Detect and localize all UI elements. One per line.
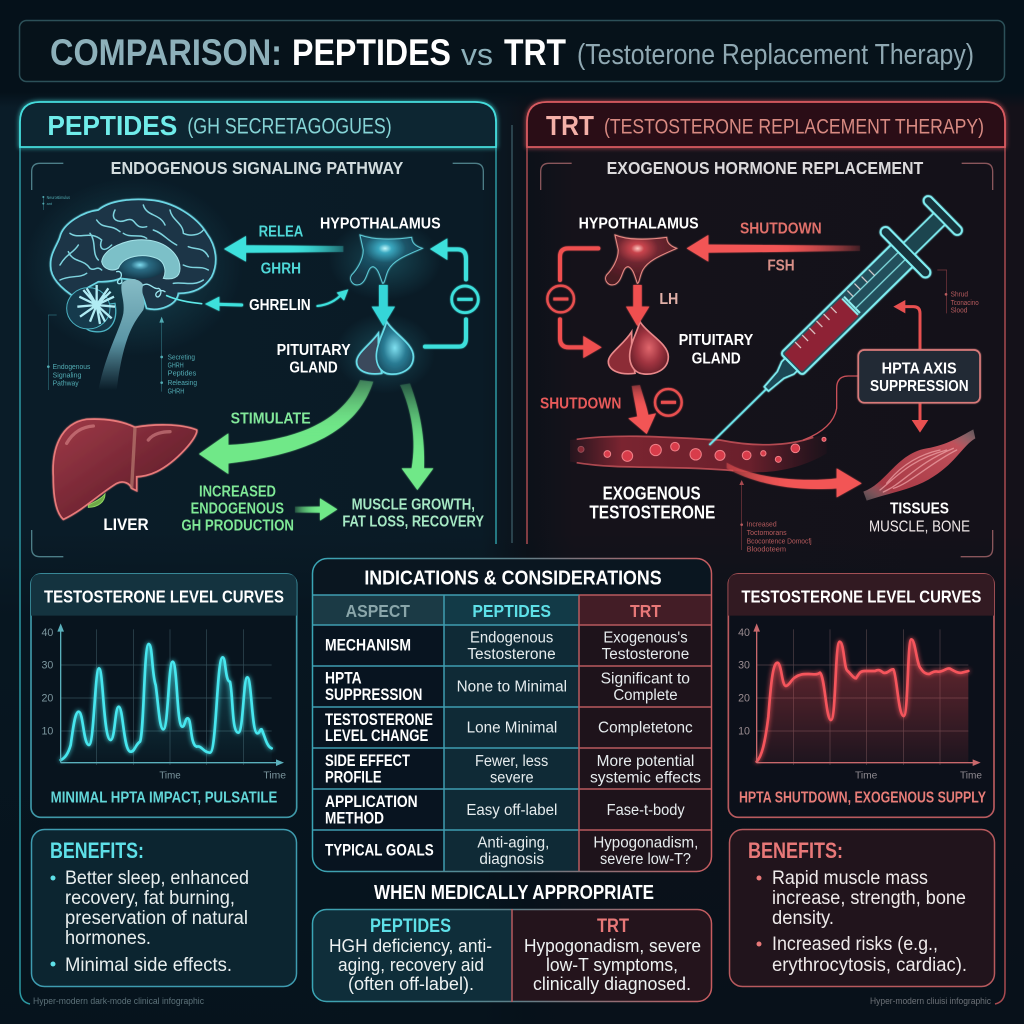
title bar: PEPTIDES <box>292 32 451 73</box>
panel: when medically appropriate: (often off-label). <box>348 974 474 994</box>
flow labels <box>540 215 970 536</box>
arrow: negative feedback <box>560 248 602 358</box>
panel: trt benefits: erythrocytosis, cardiac). <box>772 955 967 976</box>
flow labels: FSH <box>767 258 795 275</box>
pathway heading <box>32 158 483 557</box>
title bar <box>20 20 1004 82</box>
arrow: ghrelin <box>205 289 348 311</box>
table: indications and considerations: Completetonc <box>598 720 693 737</box>
panel: trt benefits <box>730 830 994 986</box>
panel: peptides benefits <box>32 830 296 986</box>
chart: trt testosterone curves: 40 <box>738 627 750 639</box>
icon: brain <box>23 177 243 390</box>
chart: trt testosterone curves: Time <box>960 770 982 781</box>
flow labels: LH <box>659 291 678 308</box>
table: indications and considerations: Testosterone <box>467 646 556 663</box>
panel: when medically appropriate: Hypogonadism, severe <box>524 936 701 956</box>
icon: minus <box>655 389 682 416</box>
annotation: brain labels: GHRH <box>168 360 184 369</box>
panel: trt benefits: density. <box>772 908 834 929</box>
annotation: brain labels <box>42 195 197 395</box>
table: indications and considerations: Significant to <box>601 670 690 687</box>
callout: HPTA axis suppression: HPTA AXIS <box>882 360 957 377</box>
table: indications and considerations: TESTOSTERONE <box>325 710 433 729</box>
annotation: brain labels: Releasing <box>168 378 197 387</box>
table: indications and considerations: TRT <box>630 601 661 621</box>
table: indications and considerations: Exogenous's <box>603 630 688 647</box>
panel: when medically appropriate: aging, recovery aid <box>338 955 484 975</box>
table: indications and considerations: Complete <box>613 687 678 704</box>
icon: hypothalamus <box>328 220 442 300</box>
table: indications and considerations: INDICATIONS & CONSIDERATIONS <box>364 567 662 589</box>
flow labels: GHRH <box>261 260 301 277</box>
table: indications and considerations: Easy off-label <box>466 802 557 819</box>
annotation: small notes <box>739 270 979 553</box>
table: indications and considerations: LEVEL CHANGE <box>325 726 428 745</box>
peptides heading: PEPTIDES <box>47 110 177 141</box>
annotation: small notes: Slood <box>951 306 967 315</box>
panel: when medically appropriate: PEPTIDES <box>370 916 451 937</box>
flow labels: EXOGENOUS <box>603 482 701 503</box>
flow labels: MUSCLE GROWTH, <box>352 496 475 513</box>
flow labels: STIMULATE <box>231 410 311 427</box>
icon: muscle <box>863 429 975 501</box>
panel: peptides benefits: BENEFITS: <box>50 838 144 863</box>
peptides heading: (GH SECRETAGOGUES) <box>187 113 392 138</box>
table: indications and considerations: Fase-t-body <box>607 802 685 819</box>
flow labels: TESTOSTERONE <box>589 502 715 523</box>
table: indications and considerations: Hypogonadism, <box>593 835 698 852</box>
annotation: small notes: Increased <box>747 520 777 529</box>
arrow: stimulate liver <box>199 380 373 474</box>
annotation: brain labels: GHRH <box>168 386 184 395</box>
footer note right: Hyper-modern cliuisi infographic <box>870 996 991 1006</box>
annotation: brain labels: Signaling <box>53 370 81 379</box>
icon: pituitary gland <box>335 313 435 393</box>
flow labels: INCREASED <box>199 484 276 501</box>
panel: when medically appropriate: TRT <box>597 916 629 937</box>
flow labels: GH PRODUCTION <box>181 518 294 535</box>
table: indications and considerations: PROFILE <box>325 767 382 786</box>
icon: liver <box>53 419 197 519</box>
table: indications and considerations: Anti-aging, <box>477 835 549 852</box>
flow labels: TISSUES <box>890 500 949 517</box>
pathway heading: ENDOGENOUS SIGNALING PATHWAY <box>111 158 403 178</box>
flow labels: MUSCLE, BONE <box>869 519 970 536</box>
trt diagram <box>540 110 993 557</box>
peptides heading <box>47 110 392 141</box>
panel: when medically appropriate <box>312 909 712 1002</box>
callout: HPTA axis suppression: SUPPRESSION <box>870 378 969 395</box>
chart: trt testosterone curves <box>728 574 994 817</box>
arrow: hypothalamus to pituitary <box>372 285 395 326</box>
table: indications and considerations: HPTA <box>325 669 362 688</box>
table: indications and considerations: MECHANISM <box>325 636 411 655</box>
arrow: feedback loop <box>425 238 466 347</box>
chart: peptides testosterone curves: TESTOSTERONE LEVEL CURVES <box>44 586 284 606</box>
icon: minus <box>452 286 478 313</box>
arrow: to muscle growth <box>400 383 433 490</box>
chart: peptides testosterone curves: Time <box>263 770 286 781</box>
flow labels: FAT LOSS, RECOVERY <box>342 514 484 531</box>
annotation: small notes: Toctomorans <box>747 528 787 537</box>
arrow: blood to tissues <box>727 463 862 497</box>
icon: syringe <box>686 189 969 469</box>
panel: when medically appropriate: HGH deficiency, anti- <box>329 936 492 956</box>
arrow: GHRH release <box>224 236 343 262</box>
flow labels: GLAND <box>289 360 338 377</box>
table: indications and considerations: Fewer, less <box>475 753 549 770</box>
flow labels <box>103 215 484 535</box>
flow labels: SHUTDOWN <box>740 220 822 237</box>
flow labels: HYPOTHALAMUS <box>579 215 699 232</box>
table: indications and considerations: More potential <box>597 753 694 770</box>
replacement heading <box>541 158 993 557</box>
table: indications and considerations: Lone Minimal <box>467 720 557 737</box>
annotation: small notes: Shrud <box>951 290 968 299</box>
chart: trt testosterone curves: 20 <box>738 693 750 705</box>
trt heading: TRT <box>546 110 594 141</box>
footer note left: Hyper-modern dark-mode clinical infographic <box>33 996 204 1006</box>
table: indications and considerations: diagnosis <box>479 851 544 868</box>
divider <box>511 125 513 543</box>
arrow: GH production to outcome <box>295 498 337 521</box>
panel: when medically appropriate: clinically diagnosed. <box>533 974 691 994</box>
table: indications and considerations: METHOD <box>325 808 384 827</box>
flow labels: RELEA <box>259 224 304 241</box>
trt heading <box>546 110 984 141</box>
table: indications and considerations: PEPTIDES <box>472 601 551 621</box>
title bar: COMPARISON: <box>50 32 282 73</box>
icon: pituitary gland <box>608 322 668 374</box>
chart: trt testosterone curves: 10 <box>738 726 750 738</box>
panel: trt benefits: increase, strength, bone <box>772 888 966 909</box>
chart: trt testosterone curves: 30 <box>738 660 750 672</box>
flow labels: PITUITARY <box>679 332 754 349</box>
arrow: HPTA feedback up <box>893 300 928 433</box>
panel: peptides benefits: recovery, fat burning, <box>65 888 235 909</box>
panel: trt benefits: Rapid muscle mass <box>772 868 928 889</box>
flow labels: GHRELIN <box>249 297 311 314</box>
icon: minus <box>547 286 574 312</box>
table: indications and considerations: Endogenous <box>470 630 554 647</box>
chart: peptides testosterone curves: 20 <box>41 693 53 705</box>
chart: peptides testosterone curves: MINIMAL HPTA IMPACT, PULSATILE <box>51 789 277 806</box>
arrow: shutdown hypothalamus <box>687 235 860 262</box>
table: indications and considerations: severe low-T? <box>600 851 691 868</box>
table: indications and considerations: Testosterone <box>602 646 689 663</box>
panel: peptides benefits: Better sleep, enhanced <box>65 868 249 889</box>
chart: peptides testosterone curves <box>31 574 297 817</box>
panel: when medically appropriate: low-T symptoms, <box>546 955 678 975</box>
annotation: small notes: Bloodoteem <box>747 544 786 553</box>
flow labels: GLAND <box>692 350 741 367</box>
replacement heading: EXOGENOUS HORMONE REPLACEMENT <box>607 158 923 178</box>
panel: peptides frame <box>20 102 496 1004</box>
flow labels: LIVER <box>103 515 149 534</box>
table: indications and considerations: TYPICAL GOALS <box>325 841 434 860</box>
annotation: brain labels: Peptides <box>168 368 197 377</box>
table: indications and considerations: None to Minimal <box>457 679 567 696</box>
chart: peptides testosterone curves: 30 <box>41 660 53 672</box>
arrow: LH <box>626 285 649 326</box>
table: indications and considerations: ASPECT <box>346 601 410 621</box>
annotation: brain labels: Pathway <box>53 378 79 387</box>
table: indications and considerations: APPLICATION <box>325 792 418 811</box>
peptides diagram <box>23 110 484 557</box>
annotation: small notes: Bcocontence Domocfj <box>747 536 812 545</box>
table: indications and considerations: SUPPRESSION <box>325 685 422 704</box>
table: indications and considerations: SIDE EFFECT <box>325 751 410 770</box>
table: indications and considerations <box>312 558 712 872</box>
annotation: small notes: Tconacino <box>951 298 979 307</box>
callout: HPTA axis suppression <box>858 350 980 403</box>
flow labels: HYPOTHALAMUS <box>320 215 441 232</box>
icon: hypothalamus <box>606 235 677 285</box>
panel: trt frame <box>527 102 1005 1004</box>
chart: peptides testosterone curves: 40 <box>41 627 53 639</box>
annotation: brain labels: Endogenous <box>53 362 91 371</box>
annotation: brain labels: Secreting <box>168 352 195 361</box>
annotation: brain labels: Neurostimulus <box>47 195 71 200</box>
annotation: brain labels: ant <box>47 201 53 206</box>
panel: trt benefits: BENEFITS: <box>748 838 843 863</box>
chart: trt testosterone curves: TESTOSTERONE LEVEL CURVES <box>741 586 981 606</box>
heading: when medically appropriate: WHEN MEDICALLY APPROPRIATE <box>374 882 654 904</box>
arrow: hormone suppression line <box>803 376 858 440</box>
table: indications and considerations: systemic effects <box>590 769 701 786</box>
icon: blood vessel <box>570 433 827 472</box>
flow labels: SHUTDOWN <box>540 396 621 413</box>
chart: peptides testosterone curves: 10 <box>41 726 53 738</box>
title bar: vs <box>461 37 493 72</box>
flow labels: ENDOGENOUS <box>191 501 284 518</box>
arrow: pituitary to bloodstream <box>628 385 656 434</box>
chart: trt testosterone curves: Time <box>855 770 878 781</box>
table: indications and considerations: severe <box>490 769 534 786</box>
panel: peptides benefits: hormones. <box>65 928 151 949</box>
panel: peptides benefits: preservation of natural <box>65 908 248 929</box>
panel: peptides benefits: Minimal side effects. <box>65 955 232 976</box>
flow labels: PITUITARY <box>277 342 351 359</box>
title bar: TRT <box>504 32 566 73</box>
chart: peptides testosterone curves: Time <box>159 770 181 781</box>
panel: trt benefits: Increased risks (e.g., <box>772 934 938 955</box>
